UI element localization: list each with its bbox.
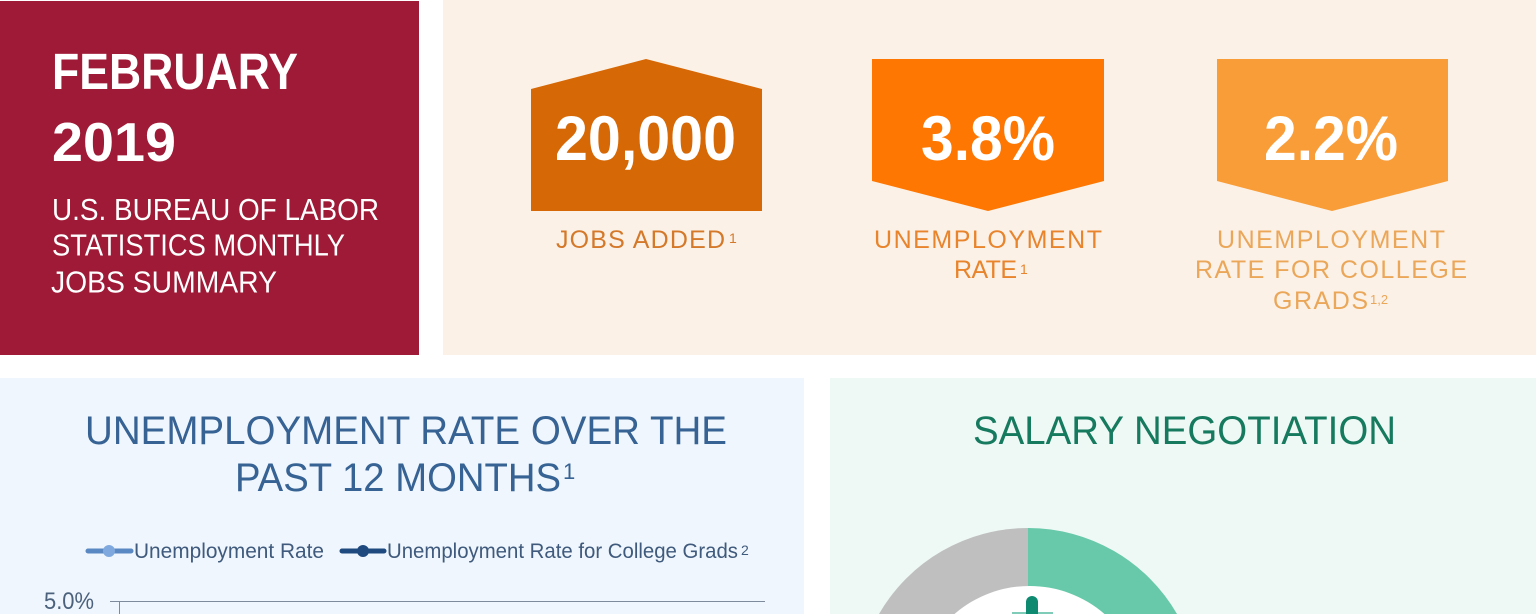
- stat: jobs added: JOBS ADDED: [556, 226, 725, 254]
- stat: unemployment rate: 3.8%: [921, 104, 1055, 174]
- stat: jobs added: 20,000: [555, 104, 736, 174]
- stat: unemployment rate: 1: [1020, 261, 1028, 277]
- legend: college grads: Unemployment Rate for College Grads: [387, 540, 738, 563]
- panel: date heading: [0, 1, 419, 355]
- stat: jobs added: 1: [729, 230, 737, 246]
- heading: chart title: [85, 409, 727, 500]
- stat: unemployment rate for college grads: UNEMPLOYMENT: [1217, 226, 1445, 254]
- donut chart: [879, 528, 1177, 614]
- heading: February 2019: FEBRUARY: [52, 43, 298, 100]
- heading: salary negotiation: SALARY NEGOTIATION: [973, 409, 1396, 453]
- stat: unemployment rate: RATE: [954, 256, 1017, 284]
- stat: unemployment rate for college grads: 1,2: [1370, 292, 1388, 307]
- panel: unemployment rate chart: [0, 378, 804, 614]
- heading: chart title: UNEMPLOYMENT RATE OVER THE: [85, 409, 727, 453]
- text: source description: U.S. BUREAU OF LABOR: [52, 192, 379, 227]
- text: source description: STATISTICS MONTHLY: [52, 228, 345, 262]
- panel: salary negotiation: [830, 378, 1536, 614]
- panel: key statistics: [443, 0, 1536, 355]
- chart legend: [88, 540, 749, 563]
- icon: plus sign: [1012, 596, 1053, 614]
- heading: February 2019: [52, 43, 298, 173]
- heading: chart title: PAST 12 MONTHS: [235, 456, 561, 500]
- heading: chart title: 1: [563, 459, 575, 484]
- stat: jobs added: [531, 59, 762, 254]
- text: source description: [51, 192, 379, 300]
- heading: February 2019: 2019: [52, 111, 176, 173]
- stat: unemployment rate for college grads: 2.2%: [1264, 104, 1398, 174]
- legend: unemployment rate: Unemployment Rate: [134, 540, 324, 563]
- stat: unemployment rate: UNEMPLOYMENT: [874, 226, 1102, 254]
- stat: unemployment rate for college grads: [1195, 59, 1467, 315]
- legend: college grads: 2: [741, 542, 749, 558]
- text: source description: JOBS SUMMARY: [51, 264, 277, 300]
- stat: unemployment rate for college grads: RATE FOR COLLEGE: [1195, 256, 1467, 284]
- stat: unemployment rate for college grads: GRADS: [1273, 287, 1368, 315]
- stat: unemployment rate: [872, 59, 1104, 284]
